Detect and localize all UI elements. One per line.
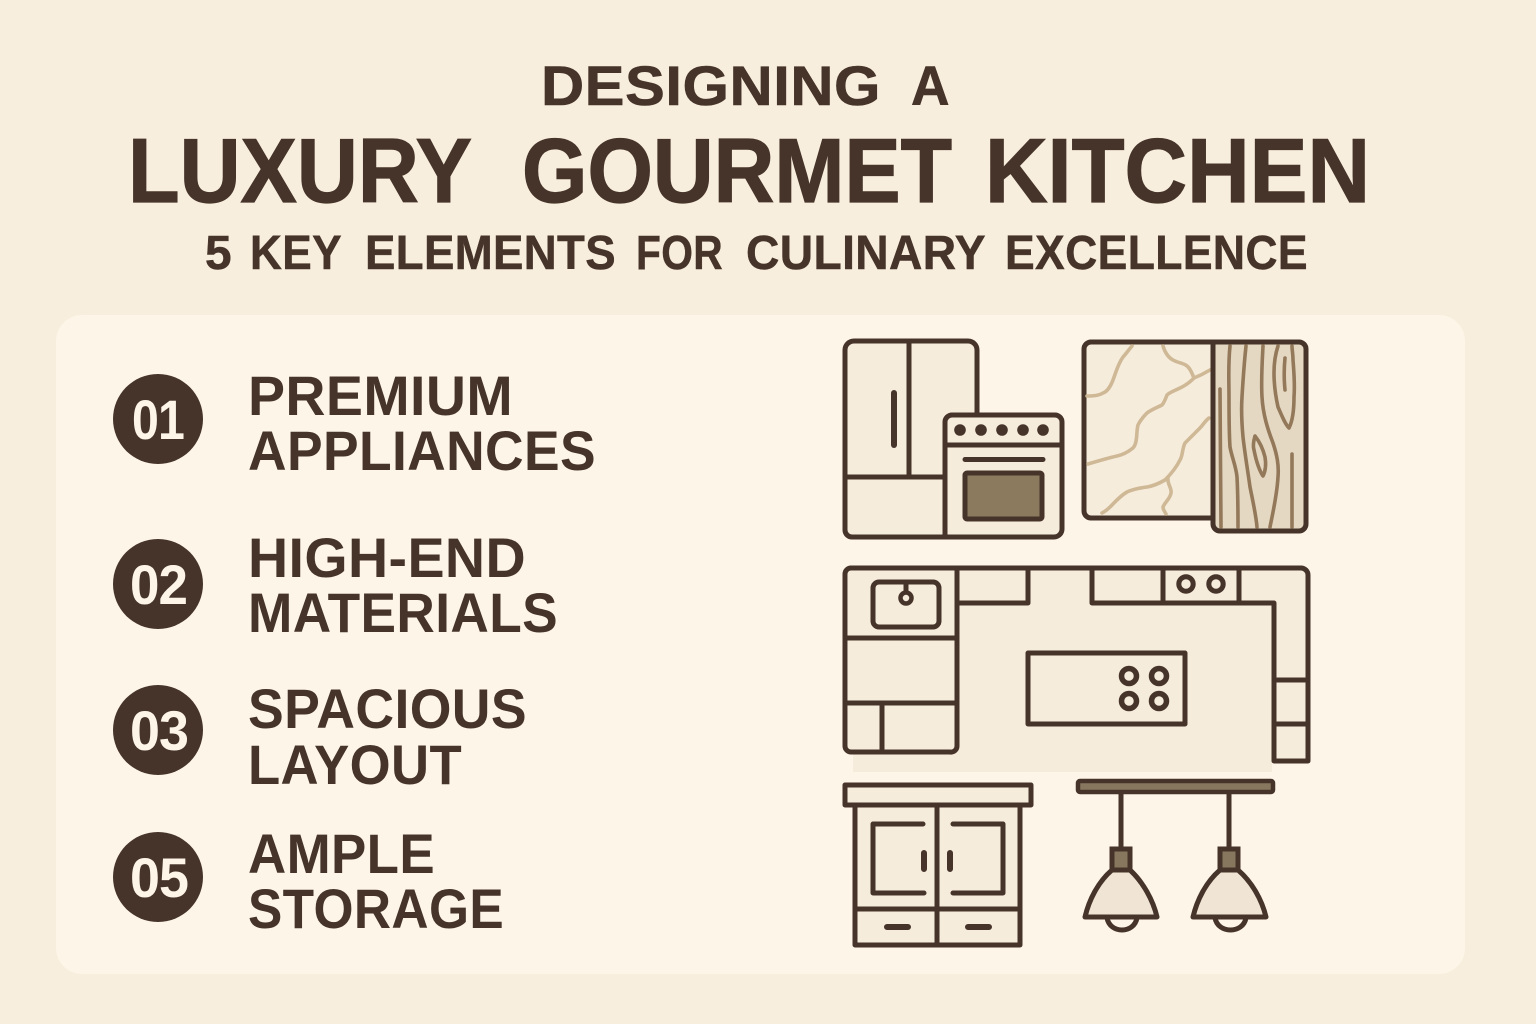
subtitle: ELEMENTS (365, 227, 616, 280)
countertop (845, 785, 1031, 805)
title line: designing a: A (911, 54, 950, 117)
wood swatch (1213, 342, 1306, 531)
marble swatch (1084, 342, 1213, 518)
list item 02: high-end materials (113, 526, 558, 644)
cabinet details (856, 806, 1019, 944)
subtitle (205, 227, 1308, 280)
label: high-end materials: HIGH-END (248, 526, 526, 589)
label: spacious layout: SPACIOUS (248, 677, 527, 740)
label: premium appliances: PREMIUM (248, 364, 513, 427)
badge 01 (113, 374, 203, 464)
subtitle: 5 (205, 227, 232, 280)
cabinet body (855, 805, 1020, 945)
title line: luxury gourmet kitchen: KITCHEN (985, 121, 1370, 222)
subtitle: EXCELLENCE (1005, 227, 1308, 280)
wall burners (1179, 577, 1223, 591)
label: spacious layout: LAYOUT (248, 733, 462, 796)
badge 05 (113, 832, 203, 922)
label: ample storage: AMPLE (248, 822, 435, 885)
left pendant (1085, 793, 1157, 930)
subtitle: CULINARY (746, 227, 986, 280)
oven (945, 415, 1062, 537)
badge 03 (113, 685, 203, 775)
ceiling rail (1078, 781, 1273, 792)
label: high-end materials (248, 526, 558, 644)
icon: storage cabinet (845, 785, 1031, 945)
label: spacious layout (248, 677, 527, 796)
label: ample storage: STORAGE (248, 877, 504, 940)
icon: pendant lights (1078, 781, 1273, 930)
badge 02 (113, 539, 203, 629)
subtitle: FOR (636, 227, 723, 280)
list item 01: premium appliances (113, 364, 596, 482)
right pendant (1193, 793, 1266, 930)
kitchen island with cooktop (1028, 653, 1185, 724)
label: premium appliances (248, 364, 596, 482)
label: premium appliances: APPLIANCES (248, 419, 596, 482)
label: high-end materials: MATERIALS (248, 581, 558, 644)
list item 05: ample storage (113, 822, 504, 940)
title line: luxury gourmet kitchen: LUXURY (128, 121, 472, 222)
icon: fridge and oven (845, 341, 1062, 537)
title line: luxury gourmet kitchen: GOURMET (522, 121, 952, 222)
badge 01: 01 (132, 388, 184, 451)
fridge (845, 341, 977, 537)
subtitle: KEY (250, 227, 342, 280)
label: ample storage (248, 822, 504, 940)
list item 03: spacious layout (113, 677, 527, 796)
title line: luxury gourmet kitchen (128, 121, 1370, 222)
panel: content card (56, 315, 1465, 974)
badge 03: 03 (130, 699, 188, 762)
plan walls (845, 568, 1308, 761)
icon: kitchen floor plan (845, 568, 1308, 772)
title line: designing a: DESIGNING (541, 54, 881, 117)
sink (873, 582, 939, 627)
icon: marble and wood swatches (1084, 342, 1306, 531)
badge 02: 02 (130, 553, 187, 616)
badge 05: 05 (130, 846, 188, 909)
